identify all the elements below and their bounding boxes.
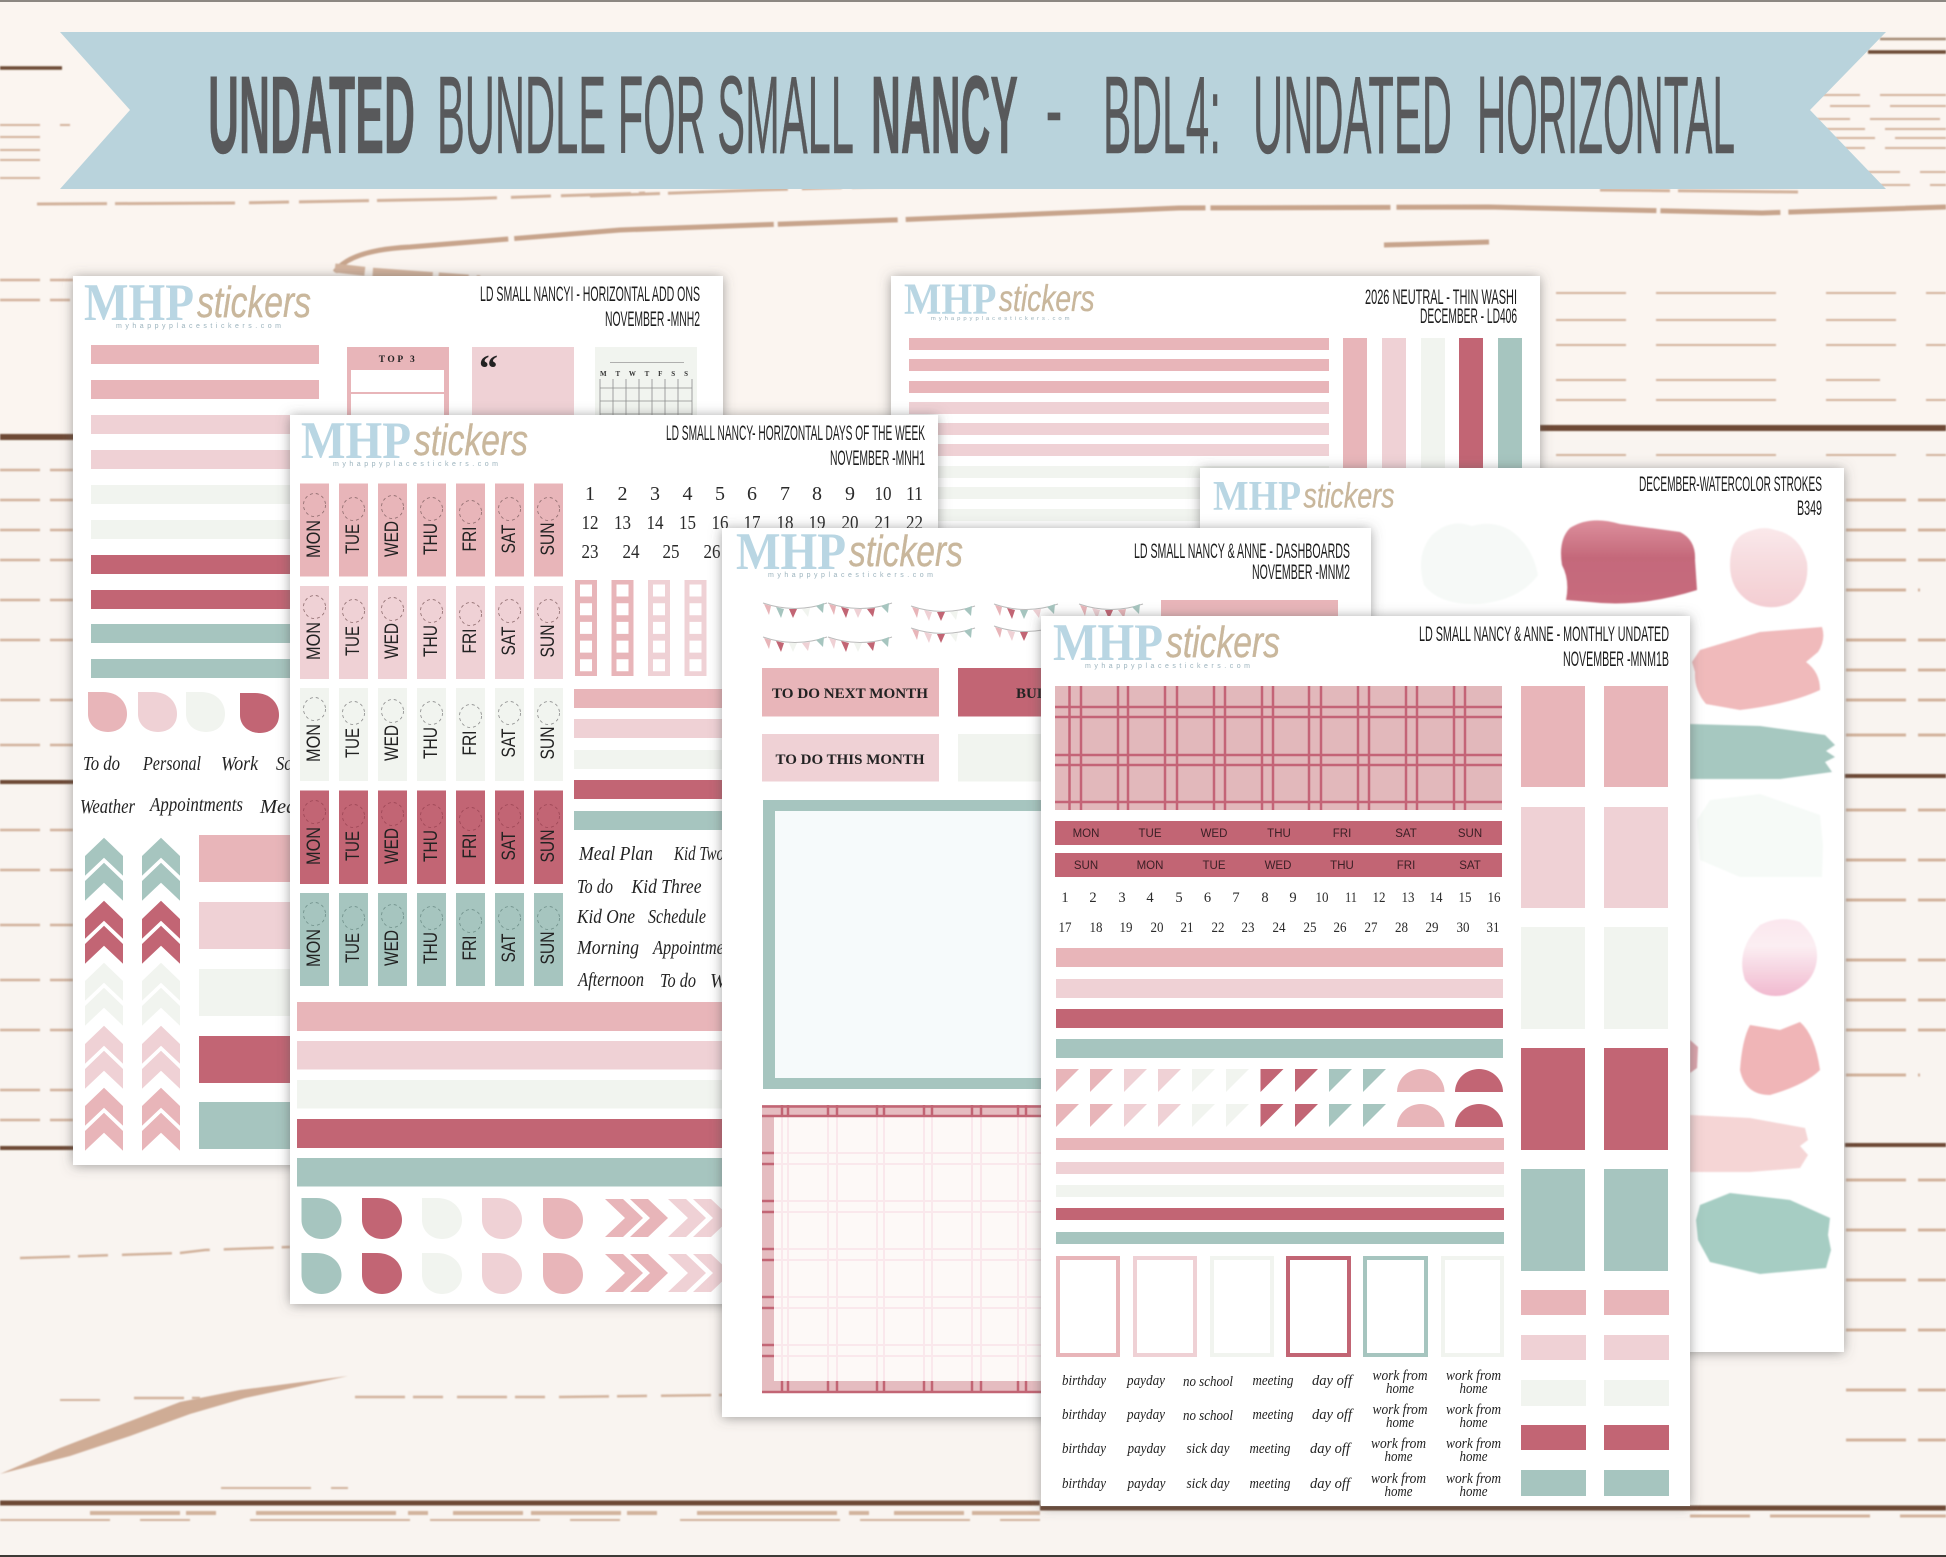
weekday strip sunday start: FRI — [1397, 860, 1415, 872]
day tabs pale pink — [300, 586, 563, 679]
washi bars — [91, 345, 319, 678]
date numbers: 22 — [906, 512, 923, 534]
quote box — [472, 347, 574, 427]
logo: myhappyplacestickers.com — [116, 323, 281, 330]
sheet title: LD SMALL NANCYI - HORIZONTAL ADD ONS — [480, 283, 700, 306]
date numbers: 3 — [1118, 890, 1126, 906]
date numbers: 16 — [712, 512, 728, 534]
logo: MHP — [84, 274, 194, 332]
banner heading text: NANCY — [871, 54, 1018, 177]
event words: meeting — [1252, 1373, 1294, 1389]
event words: birthday — [1062, 1476, 1106, 1492]
plaid dashboard frame — [762, 1105, 1102, 1393]
planner words: School — [276, 753, 321, 775]
day tabs pink: SUN — [538, 522, 559, 556]
drops — [88, 692, 279, 733]
event words: work from — [1372, 1368, 1428, 1384]
date numbers: 22 — [1212, 920, 1224, 936]
event words: work from — [1446, 1368, 1501, 1384]
planner words: Kid Two — [673, 843, 724, 865]
day tabs pink — [300, 484, 563, 576]
chevrons column — [85, 838, 180, 1151]
vertical thin bars — [1343, 338, 1522, 473]
thin bars — [1056, 1138, 1504, 1244]
horizontal thin bars — [909, 338, 1329, 521]
top 3 box — [347, 347, 449, 427]
plaid panel — [1055, 686, 1502, 810]
day tabs rose: THU — [421, 830, 442, 862]
colour blocks — [199, 835, 294, 1149]
logo: MHP — [301, 412, 411, 470]
event words: day off — [1312, 1373, 1354, 1389]
day tabs sage: SAT — [499, 728, 520, 758]
day tabs rose: WED — [382, 828, 403, 864]
logo: myhappyplacestickers.com — [931, 316, 1070, 322]
event words: birthday — [1062, 1407, 1106, 1423]
day tabs pink: WED — [382, 521, 403, 557]
event words: day off — [1312, 1407, 1354, 1423]
day tabs teal: SAT — [499, 933, 520, 962]
event words: payday — [1127, 1476, 1166, 1492]
quote box: “ — [479, 348, 498, 390]
logo: myhappyplacestickers.com — [768, 572, 933, 579]
day tabs teal: FRI — [460, 936, 481, 960]
mini calendar: M T W T F S S — [600, 370, 688, 378]
date numbers: 7 — [780, 483, 790, 505]
budget label — [958, 668, 1135, 716]
outlined boxes — [1058, 1258, 1502, 1355]
event words: payday — [1127, 1441, 1166, 1457]
to do next month label: TO DO NEXT MONTH — [772, 686, 928, 702]
event words: sick day — [1186, 1441, 1230, 1457]
date numbers: 7 — [1232, 890, 1240, 906]
event words: day off — [1310, 1476, 1352, 1492]
event words: birthday — [1062, 1373, 1106, 1389]
planner words: Kid Three — [631, 876, 702, 898]
date numbers: 3 — [650, 483, 660, 505]
weekday strip monday start: WED — [1201, 828, 1227, 840]
day tabs sage: MON — [304, 724, 325, 762]
sheet title — [1365, 286, 1517, 328]
date numbers: 25 — [662, 541, 680, 563]
event words: work from — [1446, 1436, 1501, 1452]
date numbers: 14 — [646, 512, 664, 534]
bunting banners — [763, 603, 1143, 652]
short bars — [574, 689, 724, 830]
top 3 box: TOP 3 — [379, 355, 417, 365]
checkbox strips — [575, 580, 706, 676]
date numbers: 17 — [1058, 920, 1072, 936]
logo — [736, 523, 963, 581]
logo: MHP — [736, 523, 846, 581]
banner heading text: - — [1046, 78, 1062, 145]
day tabs pale pink: SUN — [538, 624, 559, 658]
to do next month label — [762, 668, 939, 716]
date numbers: 8 — [1261, 890, 1269, 906]
date numbers: 15 — [679, 512, 696, 534]
logo: stickers — [849, 527, 963, 576]
date numbers: 1 — [585, 483, 595, 505]
teal dashboard frame — [763, 800, 1103, 1089]
day tabs rose: FRI — [460, 834, 481, 858]
date numbers: 14 — [1430, 890, 1443, 906]
day tabs pale pink: TUE — [343, 626, 364, 656]
date numbers: 21 — [874, 512, 892, 534]
date numbers: 19 — [1120, 920, 1132, 936]
sheet: monthly undated — [1041, 614, 1690, 1506]
weekday strip sunday start: WED — [1265, 860, 1291, 872]
weekday strip monday start: SAT — [1395, 828, 1417, 840]
day tabs sage: TUE — [343, 728, 364, 758]
planner words: To do — [83, 753, 120, 775]
date numbers: 23 — [582, 541, 598, 563]
day tabs pale pink: FRI — [460, 628, 481, 654]
sheet title — [480, 283, 700, 331]
weekday strip sunday start: MON — [1137, 860, 1163, 872]
date numbers: 17 — [744, 512, 760, 534]
date numbers — [1058, 890, 1500, 936]
day tabs teal: THU — [421, 932, 442, 964]
event words: day off — [1310, 1441, 1352, 1457]
weekday strip sunday start: THU — [1330, 860, 1354, 872]
event words: home — [1460, 1449, 1488, 1465]
weekday strip monday start: THU — [1267, 828, 1291, 840]
logo: stickers — [1303, 477, 1395, 516]
day tabs teal — [300, 893, 563, 986]
event words: home — [1460, 1381, 1488, 1397]
planner words — [576, 843, 751, 992]
date numbers: 23 — [1242, 920, 1254, 936]
date numbers: 5 — [715, 483, 725, 505]
date numbers: 6 — [747, 483, 757, 505]
event words: home — [1460, 1415, 1488, 1431]
day tabs teal: WED — [382, 930, 403, 966]
day tabs teal: TUE — [343, 933, 364, 963]
banner heading text: UNDATED — [208, 54, 415, 177]
date numbers: 28 — [1395, 920, 1408, 936]
date numbers: 4 — [682, 483, 692, 505]
planner words: Work — [221, 753, 259, 775]
day tabs pale pink: THU — [421, 625, 442, 657]
to do this month label — [762, 734, 939, 782]
logo — [1053, 614, 1280, 672]
event words: meeting — [1250, 1441, 1291, 1457]
date numbers: 5 — [1175, 890, 1183, 906]
logo — [904, 273, 1095, 323]
event words — [1062, 1368, 1501, 1500]
tall colour blocks — [1521, 686, 1668, 1271]
watercolor swatches — [1421, 520, 1835, 1274]
event words: no school — [1183, 1374, 1233, 1390]
sheet: horizontal add ons: NOVEMBER -MNH2 — [605, 308, 700, 331]
planner words: Appointments — [148, 794, 243, 816]
wide bars — [1056, 948, 1503, 1058]
date numbers: 15 — [1458, 890, 1472, 906]
right arrows — [605, 1199, 731, 1292]
date numbers: 16 — [1488, 890, 1500, 906]
planner words — [80, 753, 321, 818]
logo — [301, 412, 528, 470]
logo: MHP — [904, 273, 996, 323]
date numbers — [582, 483, 923, 563]
logo — [1213, 473, 1395, 520]
event words: work from — [1446, 1402, 1501, 1418]
date numbers: 29 — [1426, 920, 1438, 936]
date numbers: 20 — [1150, 920, 1164, 936]
weekday strip sunday start — [1055, 853, 1502, 877]
sheet title — [1419, 623, 1669, 671]
weekday strip monday start: MON — [1073, 828, 1099, 840]
sheet: days of the week: LD SMALL NANCY- HORIZONTAL DAYS OF THE WEEK — [666, 422, 925, 445]
sheet title — [666, 422, 925, 470]
logo: myhappyplacestickers.com — [333, 461, 498, 468]
wide washi bars — [297, 1002, 727, 1186]
day tabs sage: WED — [382, 725, 403, 761]
date numbers: 2 — [618, 483, 628, 505]
day tabs sage — [300, 688, 563, 781]
logo — [84, 274, 311, 332]
event words: home — [1386, 1381, 1414, 1397]
planner words: Appointments — [651, 937, 743, 959]
to do this month label: TO DO THIS MONTH — [776, 752, 925, 768]
event words: home — [1384, 1449, 1413, 1465]
date numbers: 1 — [1061, 890, 1069, 906]
date numbers: 13 — [614, 512, 631, 534]
date numbers: 26 — [704, 541, 720, 563]
sheet title: 2026 NEUTRAL - THIN WASHI — [1365, 286, 1517, 309]
event words: meeting — [1252, 1407, 1294, 1423]
date numbers: 24 — [622, 541, 640, 563]
date numbers: 6 — [1204, 890, 1211, 906]
planner words: Morning — [576, 937, 639, 959]
date numbers: 12 — [582, 512, 598, 534]
planner words: Personal — [142, 753, 201, 775]
weekday strip sunday start: SUN — [1074, 860, 1098, 872]
event words: birthday — [1062, 1441, 1106, 1457]
date numbers: 13 — [1402, 890, 1414, 906]
sheet: days of the week: NOVEMBER -MNH1 — [830, 447, 925, 470]
banner heading text: BUNDLE FOR SMALL — [437, 54, 854, 177]
pink label block — [1161, 600, 1338, 630]
date numbers: 12 — [1372, 890, 1386, 906]
drops — [302, 1198, 583, 1294]
sheet: horizontal add ons — [73, 274, 723, 1165]
planner words: Schedule — [648, 906, 706, 928]
day tabs pale pink: SAT — [499, 626, 520, 656]
sheet title: B349 — [1797, 497, 1822, 520]
day tabs rose: SUN — [538, 830, 559, 862]
day tabs teal: MON — [304, 929, 325, 967]
day tabs pink: SAT — [499, 524, 520, 554]
date numbers: 18 — [1090, 920, 1102, 936]
day tabs rose: TUE — [343, 831, 364, 861]
date numbers: 10 — [1316, 890, 1328, 906]
date numbers: 10 — [874, 483, 892, 505]
date numbers: 2 — [1089, 890, 1097, 906]
sheet: thin washi — [891, 273, 1540, 576]
diagonal wood crack — [0, 1376, 348, 1474]
planner words: To do — [577, 876, 613, 898]
event words: no school — [1183, 1408, 1233, 1424]
logo: MHP — [1053, 614, 1163, 672]
event words: home — [1384, 1484, 1413, 1500]
day tabs sage: FRI — [460, 730, 481, 756]
sheet: dashboards — [722, 523, 1371, 1417]
weekday strip monday start: TUE — [1138, 828, 1162, 840]
sheet title — [1134, 540, 1350, 584]
weekday strip monday start: FRI — [1333, 828, 1351, 840]
date numbers: 31 — [1486, 920, 1500, 936]
day tabs pale pink: WED — [382, 623, 403, 659]
date numbers: 24 — [1272, 920, 1286, 936]
pale label — [958, 734, 1135, 782]
event words: payday — [1126, 1407, 1165, 1423]
weekday strip monday start: SUN — [1458, 828, 1482, 840]
date numbers: 11 — [1345, 890, 1357, 906]
logo: myhappyplacestickers.com — [1085, 663, 1250, 670]
event words: work from — [1371, 1436, 1426, 1452]
date numbers: 20 — [842, 512, 858, 534]
half circles — [1397, 1069, 1503, 1127]
day tabs pink: TUE — [343, 524, 364, 554]
banner heading text: UNDATED — [1253, 54, 1452, 177]
date numbers: 8 — [812, 483, 822, 505]
event words: work from — [1372, 1402, 1428, 1418]
date numbers: 30 — [1456, 920, 1470, 936]
planner words: Meals — [259, 796, 310, 818]
day tabs rose: SAT — [499, 831, 520, 860]
date numbers: 11 — [906, 483, 923, 505]
event words: meeting — [1250, 1476, 1291, 1492]
planner words: Work — [710, 970, 751, 992]
logo: stickers — [414, 416, 528, 465]
event words: sick day — [1186, 1476, 1230, 1492]
planner words: Kid One — [576, 906, 635, 928]
triangle flags — [1056, 1069, 1386, 1127]
day tabs teal: SUN — [538, 932, 559, 964]
date numbers: 9 — [845, 483, 855, 505]
small colour blocks — [1521, 1290, 1669, 1496]
sheet title: NOVEMBER -MNM2 — [1252, 561, 1350, 584]
event words: work from — [1371, 1471, 1426, 1487]
weekday strip sunday start: SAT — [1459, 860, 1481, 872]
sheet: days of the week — [290, 412, 938, 1304]
event words: payday — [1126, 1373, 1165, 1389]
day tabs rose — [300, 790, 563, 884]
budget label: BUDGET — [1016, 686, 1079, 702]
planner words: Afternoon — [576, 969, 644, 991]
day tabs sage: SUN — [538, 726, 559, 760]
planner words: Weather — [80, 796, 135, 818]
weekday strip monday start — [1055, 821, 1502, 845]
date numbers: 4 — [1146, 890, 1154, 906]
sheet title: LD SMALL NANCY & ANNE - DASHBOARDS — [1134, 540, 1350, 563]
planner words: To do — [660, 970, 696, 992]
event words: home — [1386, 1415, 1414, 1431]
date numbers: 9 — [1289, 890, 1297, 906]
sheet title — [1639, 473, 1822, 520]
date numbers: 19 — [808, 512, 826, 534]
banner heading text: BDL4: — [1103, 54, 1221, 177]
sheet title: LD SMALL NANCY & ANNE - MONTHLY UNDATED — [1419, 623, 1669, 646]
date numbers: 27 — [1364, 920, 1378, 936]
sheet: thin washi: DECEMBER - LD406 — [1420, 305, 1517, 328]
logo: stickers — [197, 278, 311, 327]
date numbers: 26 — [1334, 920, 1346, 936]
day tabs pale pink: MON — [304, 622, 325, 660]
date numbers: 21 — [1180, 920, 1194, 936]
logo: stickers — [999, 278, 1095, 319]
weekday strip sunday start: TUE — [1202, 860, 1226, 872]
planner words: Meal Plan — [578, 843, 653, 865]
event words: work from — [1446, 1471, 1501, 1487]
day tabs pink: FRI — [460, 526, 481, 552]
date numbers: 18 — [776, 512, 794, 534]
event words: home — [1460, 1484, 1488, 1500]
logo: stickers — [1166, 618, 1280, 667]
sheet: watercolor strokes — [1200, 468, 1844, 1352]
mini calendar — [595, 347, 697, 430]
sheet title: NOVEMBER -MNM1B — [1563, 648, 1669, 671]
day tabs sage: THU — [421, 727, 442, 759]
logo: MHP — [1213, 473, 1301, 520]
day tabs pink: MON — [304, 520, 325, 558]
day tabs pink: THU — [421, 523, 442, 555]
date numbers: 25 — [1304, 920, 1316, 936]
title banner — [60, 32, 1886, 189]
day tabs rose: MON — [304, 827, 325, 865]
